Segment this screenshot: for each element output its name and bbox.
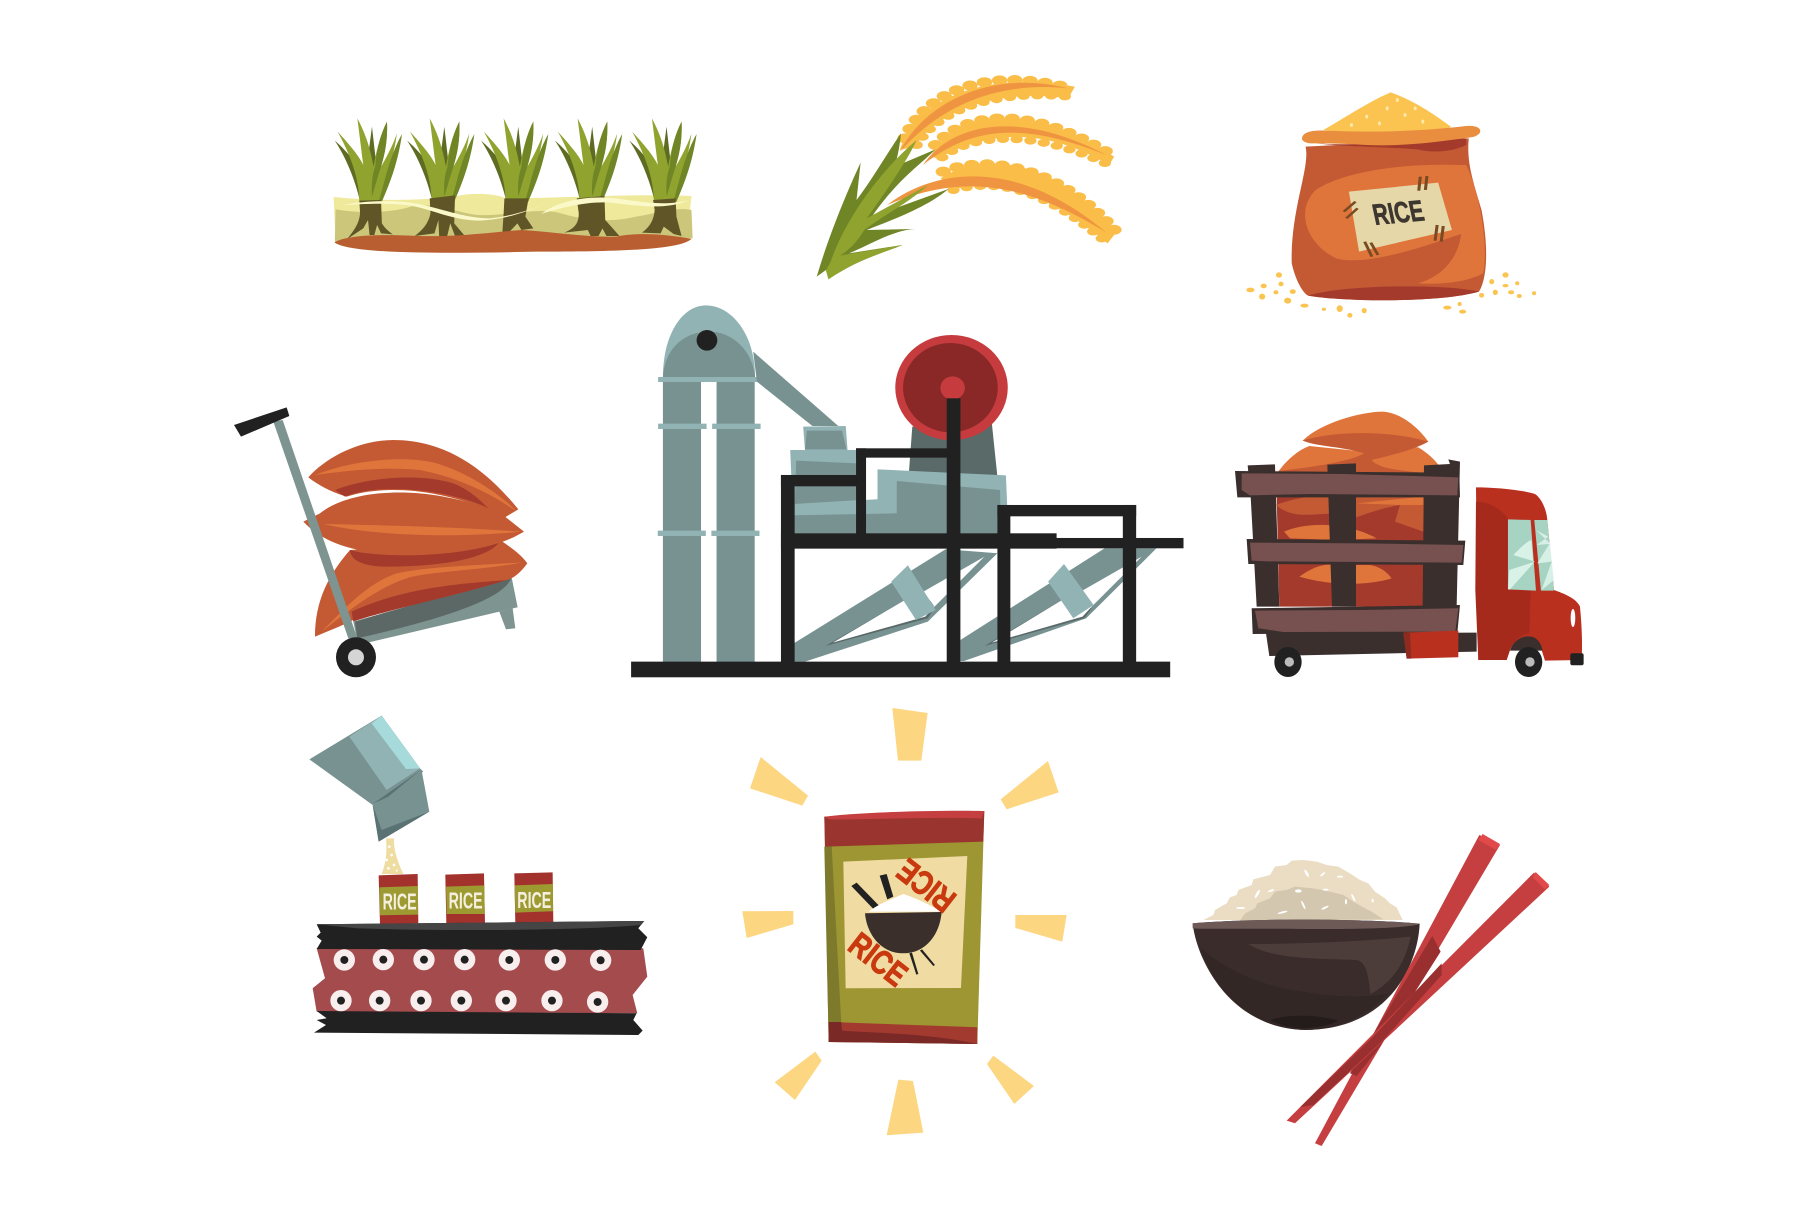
crate posts	[1248, 459, 1460, 607]
grain pile	[1323, 92, 1451, 134]
wheel	[336, 637, 376, 677]
illustration: rice milling machine	[631, 305, 1184, 677]
handle and pole	[273, 420, 357, 638]
black frame	[631, 398, 1184, 677]
rice stream	[382, 838, 403, 874]
bowl	[1193, 920, 1420, 1030]
illustration: packaged rice with shine	[742, 708, 1067, 1135]
sack label	[1349, 183, 1452, 252]
box one: RICE	[383, 888, 417, 914]
chopsticks	[1287, 834, 1549, 1146]
illustration: sack of rice	[1246, 92, 1536, 318]
package text: upper: RICE	[890, 851, 963, 919]
sacks	[303, 440, 527, 637]
box two	[445, 873, 485, 923]
cab	[1475, 487, 1584, 665]
sack rim	[1302, 126, 1480, 145]
pulley support	[909, 423, 997, 477]
hopper	[309, 716, 429, 842]
box two: RICE	[449, 888, 483, 914]
illustration: hand cart with sacks	[234, 407, 527, 677]
red step box	[1403, 631, 1458, 659]
box three	[514, 872, 553, 923]
crate boards	[1235, 471, 1465, 634]
leaves	[817, 133, 948, 279]
cart bed	[353, 577, 518, 643]
rice load	[1276, 412, 1440, 607]
box three: RICE	[517, 887, 551, 913]
panicle: lower	[887, 164, 1117, 243]
panicle: upper	[900, 80, 1075, 152]
box one	[379, 874, 418, 924]
truck chassis	[1266, 633, 1477, 656]
spilled grains	[1246, 272, 1536, 318]
hopper and body	[790, 426, 1008, 537]
rice boxes	[379, 872, 553, 924]
sack label text: RICE	[1370, 195, 1427, 232]
package	[824, 811, 984, 1044]
bowl emblem	[851, 874, 942, 975]
rice mound	[1203, 860, 1403, 921]
sack body	[1292, 138, 1486, 300]
conveyor belt	[313, 921, 647, 1035]
panicle: middle	[923, 118, 1114, 165]
illustration: bowl of rice with chopsticks	[1193, 834, 1549, 1146]
red pulley	[895, 335, 1008, 440]
illustration: ripe rice stalk	[817, 80, 1117, 279]
inclined chutes	[794, 548, 1156, 662]
package text: lower: RICE	[841, 926, 914, 994]
illustration: rice seedlings in paddy	[334, 118, 697, 253]
package label	[843, 856, 967, 988]
shine rays	[742, 708, 1067, 1135]
illustration: delivery truck	[1235, 412, 1584, 677]
illustration: filling line conveyor	[309, 716, 647, 1035]
elevator tower	[658, 305, 838, 662]
wheels	[1274, 647, 1542, 677]
